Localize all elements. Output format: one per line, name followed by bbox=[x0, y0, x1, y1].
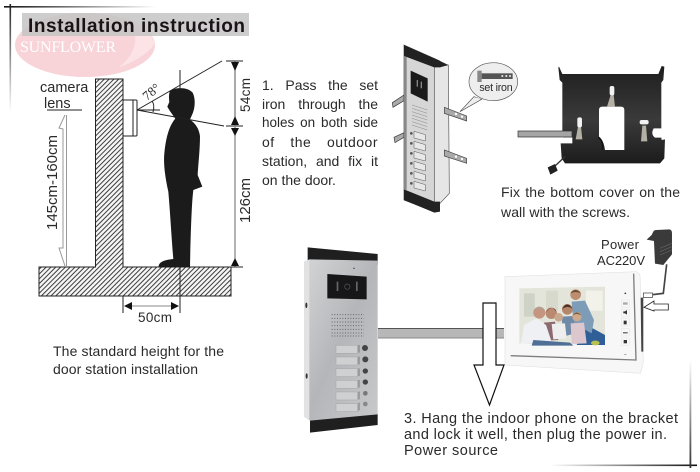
text: power label: AC220V bbox=[597, 253, 645, 268]
illustration: outdoor station with set irons bbox=[392, 45, 518, 213]
text: power label bbox=[597, 237, 645, 268]
photo: outdoor door station bbox=[304, 247, 378, 433]
dimension: 50cm: 50cm bbox=[138, 310, 172, 325]
dimension: 54cm bbox=[226, 61, 253, 126]
bracket plate bbox=[558, 66, 665, 163]
watermark: SUNFLOWER logo: SUNFLOWER bbox=[20, 39, 116, 56]
station body bbox=[404, 45, 439, 212]
centre opening bbox=[599, 107, 624, 150]
wire bbox=[598, 137, 603, 149]
left set irons bbox=[392, 95, 404, 143]
title: Installation instruction bbox=[28, 16, 245, 37]
gray rod bbox=[518, 131, 572, 137]
power cable bbox=[644, 264, 667, 296]
text block: step 1 instructions: 1. Pass the set bbox=[262, 77, 378, 93]
camera lens label bbox=[40, 80, 89, 112]
text: power label: Power bbox=[601, 237, 640, 252]
keyholes bbox=[576, 86, 649, 141]
right set irons bbox=[444, 107, 467, 163]
text: standard height caption: The standard height for the bbox=[53, 343, 224, 359]
text: step 3 bbox=[404, 411, 678, 459]
text: standard height caption: door station installation bbox=[53, 361, 198, 377]
dimension: 50cm bbox=[123, 267, 180, 325]
monitor buttons bbox=[621, 292, 629, 355]
text: standard height caption bbox=[53, 343, 224, 377]
text block: step 1 instructions: station, and fix it bbox=[262, 153, 378, 169]
speaker grille bbox=[332, 315, 364, 336]
camera window bbox=[411, 71, 428, 102]
camera lens label: lens bbox=[44, 96, 71, 112]
text block: step 1 instructions bbox=[262, 77, 378, 188]
arrow: hollow down arrow bbox=[474, 303, 504, 405]
call buttons bbox=[336, 345, 357, 412]
illustration: bracket bottom cover bbox=[548, 66, 665, 175]
text block: step 1 instructions: on the door. bbox=[262, 172, 336, 188]
watermark: SUNFLOWER logo bbox=[15, 13, 155, 77]
gray connecting bar bbox=[378, 328, 504, 338]
camera lens label: camera bbox=[40, 80, 89, 96]
dimension: 145cm-160cm bbox=[44, 115, 66, 266]
power adapter bbox=[647, 229, 672, 265]
arrow: to power socket bbox=[644, 301, 668, 311]
text: step 3: 3. Hang the indoor phone on the bracket bbox=[404, 411, 678, 427]
diagram: standard door station height bbox=[39, 61, 254, 325]
icon: camera unit on wall bbox=[123, 100, 137, 136]
camera window bbox=[327, 274, 367, 299]
text: step 2 bbox=[500, 184, 680, 220]
view angle lines bbox=[137, 61, 224, 126]
dimension: 126cm bbox=[228, 127, 254, 267]
text: step 2: wall with the screws. bbox=[500, 204, 630, 220]
dimension: 54cm: 54cm bbox=[238, 78, 253, 112]
text: step 3: Power source bbox=[404, 443, 498, 459]
dimension: 145cm-160cm: 145cm-160cm bbox=[44, 135, 61, 230]
text: step 2: Fix the bottom cover on the bbox=[501, 184, 680, 200]
name plates bbox=[414, 131, 425, 191]
wall and floor section bbox=[39, 79, 231, 296]
photo: indoor monitor bbox=[505, 229, 672, 373]
text: step 3: and lock it well, then plug the power in. bbox=[404, 427, 667, 443]
angle label: 78° bbox=[139, 80, 163, 103]
text block: step 1 instructions: holes on both side bbox=[262, 115, 378, 130]
person silhouette bbox=[159, 88, 202, 267]
text block: step 1 instructions: iron through the bbox=[262, 96, 378, 112]
callout: set iron: set iron bbox=[479, 82, 513, 94]
speaker slots bbox=[412, 105, 427, 130]
text block: step 1 instructions: of the outdoor bbox=[262, 134, 378, 150]
dimension: 126cm: 126cm bbox=[237, 178, 254, 223]
callout: set iron bbox=[460, 63, 518, 112]
screen photo: family bbox=[519, 287, 605, 346]
